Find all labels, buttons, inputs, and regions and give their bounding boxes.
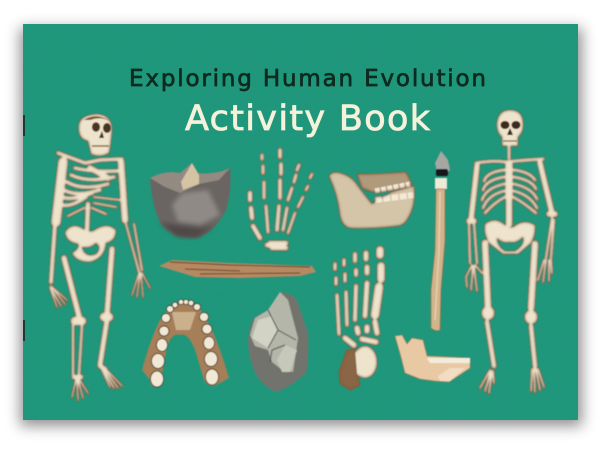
mandible fragment	[395, 335, 470, 382]
shoulders and arms	[466, 147, 555, 291]
foot bones	[335, 250, 381, 390]
wooden stick	[159, 260, 316, 278]
skull	[79, 114, 112, 156]
arms, shoulders	[50, 153, 150, 307]
title: Exploring Human Evolution	[129, 66, 486, 92]
right human skeleton	[466, 110, 555, 393]
pelvis	[485, 220, 535, 254]
lower jaw with teeth	[142, 299, 229, 387]
staples	[23, 115, 25, 341]
left ape skeleton	[50, 114, 150, 400]
legs	[64, 249, 122, 400]
pelvis	[65, 226, 116, 262]
subtitle: Activity Book	[185, 99, 431, 139]
skull	[497, 110, 523, 146]
hand bones	[250, 150, 312, 248]
legs	[480, 243, 544, 393]
upper jaw bone	[329, 172, 414, 228]
flint core	[150, 163, 230, 238]
rib cage	[62, 168, 120, 230]
gray rock	[248, 292, 308, 392]
stone tipped spear	[431, 151, 450, 331]
rib cage	[482, 165, 537, 224]
